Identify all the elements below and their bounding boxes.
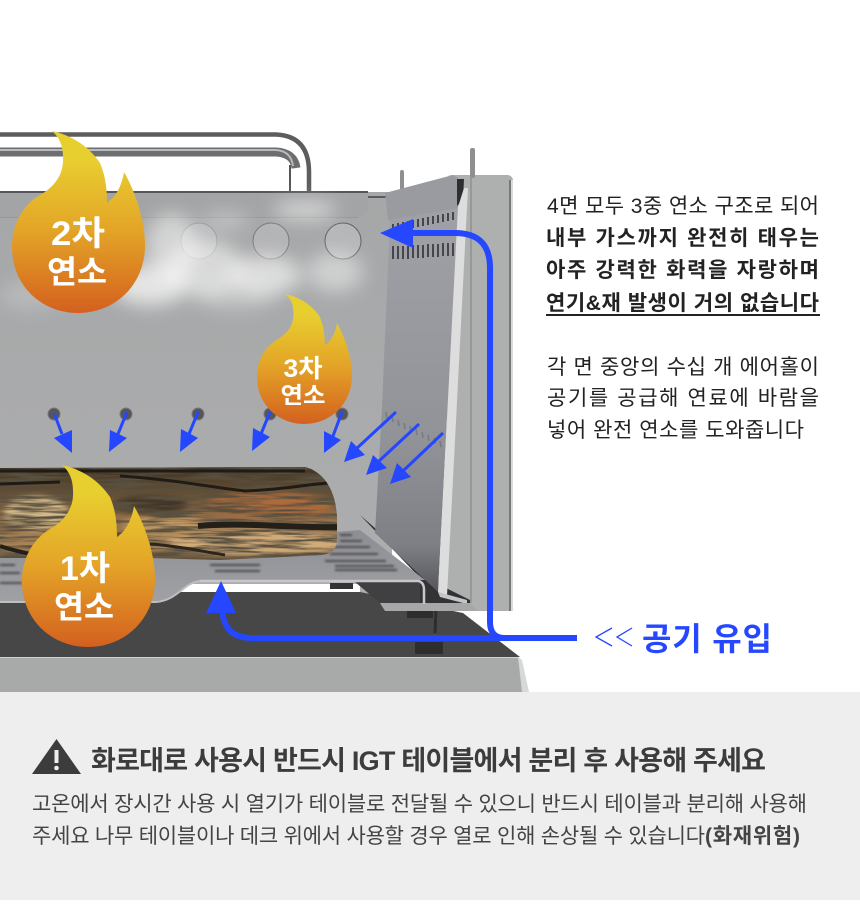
warning body text: 주세요 나무 테이블이나 데크 위에서 사용할 경우 열로 인해 손상될 수 있습니다	[32, 825, 705, 848]
flame: 1st combustion: 연소	[54, 589, 114, 625]
floor	[0, 583, 520, 657]
grate	[0, 530, 478, 611]
flame: 2nd combustion: 2차	[51, 215, 105, 253]
rear wall	[0, 192, 392, 612]
text block: combustion description: 아주 강력한 화력을 자랑하며	[546, 259, 819, 282]
warning body text: (화재위험)	[705, 825, 800, 848]
front plate	[0, 657, 529, 692]
air holes upper row	[181, 223, 361, 259]
text block: air holes description	[547, 356, 819, 442]
flame: 1st combustion	[22, 465, 155, 647]
warning heading: 화로대로 사용시 반드시 IGT 테이블에서 분리 후 사용해 주세요	[91, 746, 766, 776]
flame: 2nd combustion: 연소	[47, 254, 107, 290]
log	[0, 465, 345, 562]
wall texture	[0, 192, 392, 492]
flame: 3rd combustion: 연소	[280, 382, 326, 408]
arrows: air into lower holes	[54, 412, 443, 484]
text block: combustion description: 4면 모두 3중 연소 구조로 되어	[547, 195, 819, 218]
text block: combustion description	[546, 195, 820, 316]
warning body text: 고온에서 장시간 사용 시 열기가 테이블로 전달될 수 있으니 반드시 테이블과 분리해 사용해	[32, 793, 807, 816]
label: air intake: 공기 유입	[642, 621, 772, 657]
panel: warning	[0, 692, 860, 900]
text block: combustion description: 연기&재 발생이 거의 없습니다	[546, 292, 819, 315]
arrow: airflow under the grate	[206, 581, 577, 638]
warning body text	[32, 793, 807, 848]
side panel	[360, 175, 470, 607]
text block: combustion description: 내부 가스까지 완전히 태우는	[546, 227, 819, 250]
illustration: fire pit cross section	[0, 134, 529, 692]
icon: warning triangle	[32, 739, 81, 774]
flame: 2nd combustion	[12, 131, 145, 313]
side panel vents	[386, 212, 453, 447]
text block: air holes description: 공기를 공급해 연료에 바람을	[547, 387, 819, 410]
smoke	[0, 201, 363, 309]
wall top strip	[0, 191, 388, 218]
lower air holes	[48, 408, 348, 420]
right column	[400, 148, 513, 611]
flame: 1st combustion: 1차	[60, 550, 110, 588]
text block: air holes description: 각 면 중앙의 수십 개 에어홀이	[547, 356, 819, 379]
text block: air holes description: 넣어 완전 연소를 도와줍니다	[547, 419, 804, 442]
handle rails	[0, 134, 309, 193]
arrow: airflow to the upper holes	[380, 219, 577, 638]
flame: 3rd combustion: 3차	[284, 355, 322, 383]
flame: 3rd combustion	[257, 294, 352, 424]
